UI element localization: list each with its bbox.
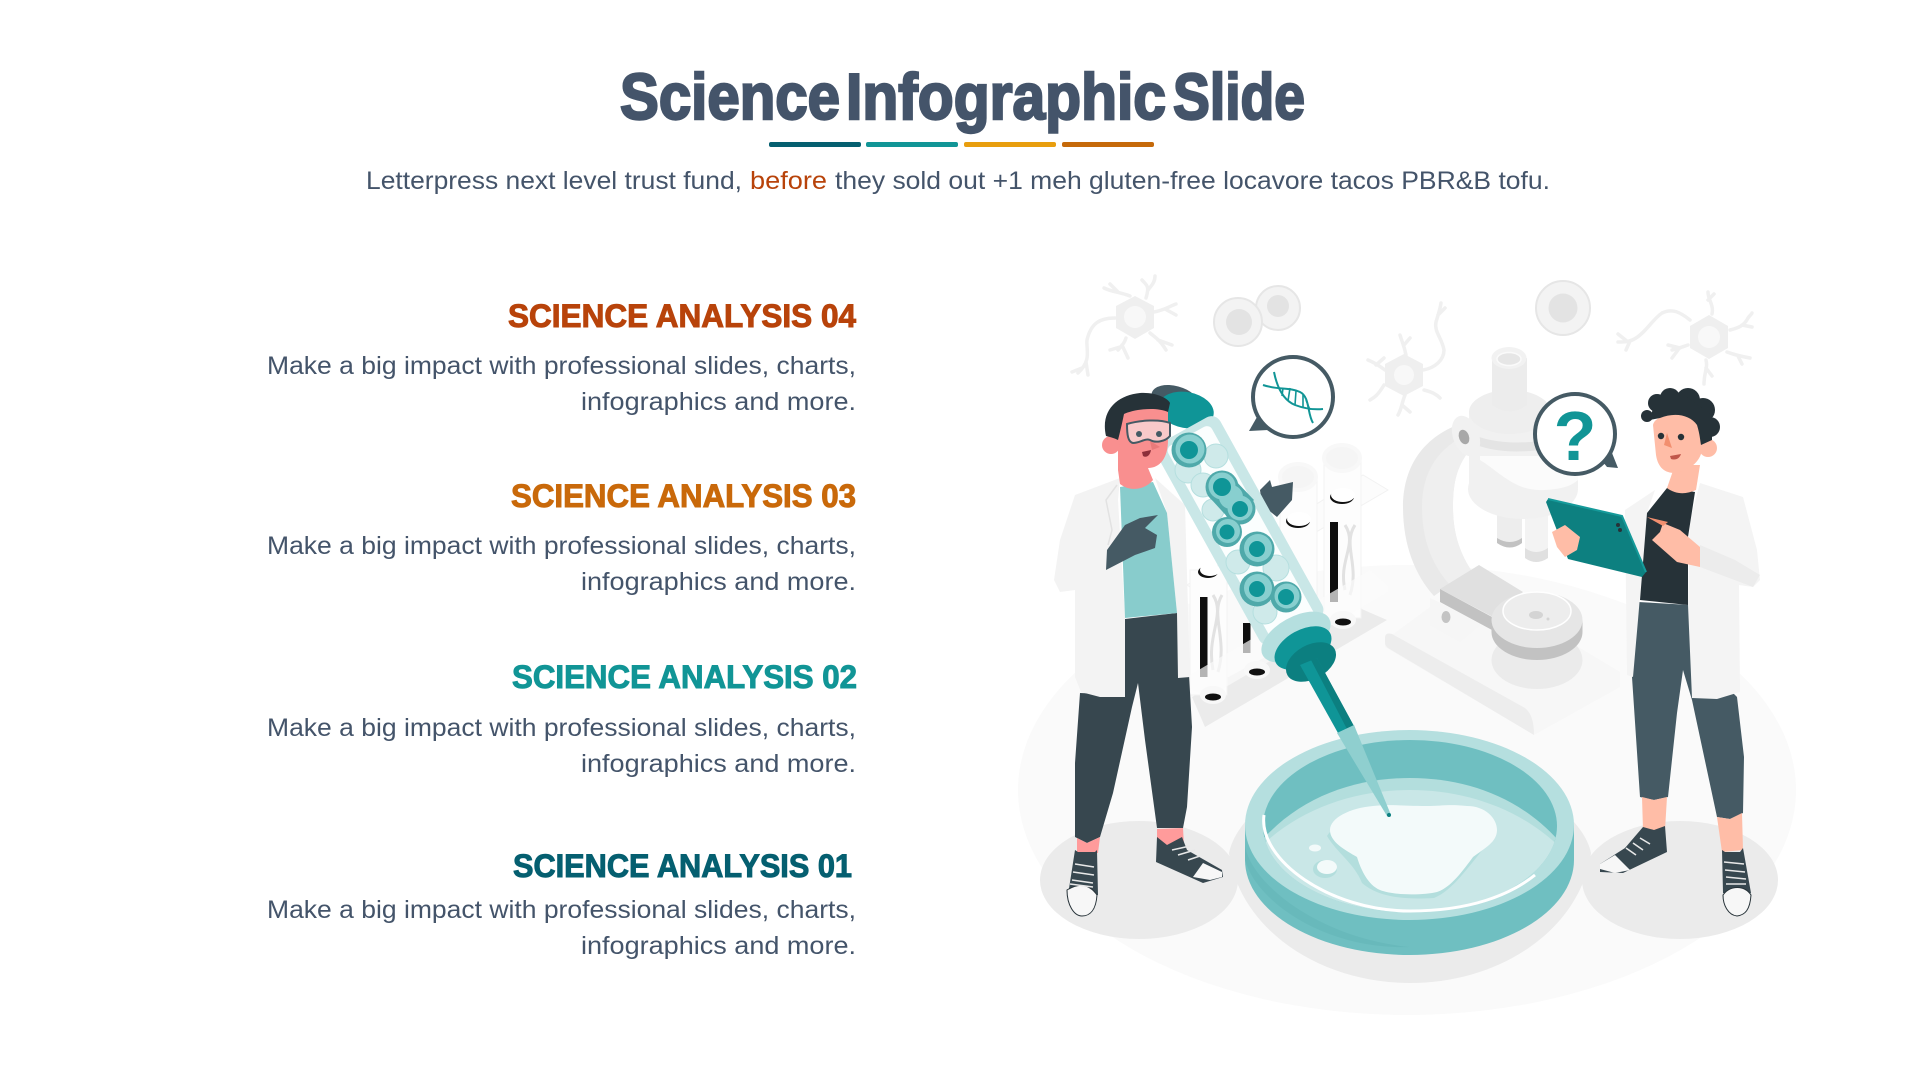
text block: science analysis 04: infographics and more. — [581, 388, 856, 416]
dish well — [1263, 740, 1557, 910]
title — [620, 60, 1305, 133]
liquid puddle shadow — [1327, 812, 1494, 898]
subtitle: before — [750, 167, 827, 195]
pants — [1632, 602, 1744, 819]
neck and face — [1118, 405, 1168, 489]
dish inner white edge — [1264, 815, 1535, 911]
teal cells — [1172, 432, 1302, 612]
text block: science analysis 01: infographics and more. — [581, 932, 856, 960]
syringe tip — [1337, 725, 1391, 817]
left scientist head — [1102, 393, 1170, 489]
rack black strips and dna — [1200, 522, 1355, 677]
syringe tube — [1153, 413, 1327, 649]
text block: science analysis 04: SCIENCE ANALYSIS 04 — [508, 298, 856, 334]
left scientist front shoe — [1067, 850, 1098, 916]
rack back tubes — [1190, 445, 1361, 695]
icon: neuron right — [1618, 292, 1752, 384]
icon: neuron top left — [1072, 276, 1176, 375]
subtitle: they sold out +1 meh gluten-free locavore tacos PBR&B tofu. — [835, 167, 1550, 195]
subtitle — [366, 167, 1550, 195]
speech bubble: question mark: ? — [1554, 397, 1596, 475]
rack bottom plate — [1190, 570, 1388, 698]
microscope base plate — [1385, 600, 1620, 735]
right scientist — [1546, 388, 1760, 916]
text block: science analysis 02: Make a big impact with professional slides, charts, — [267, 714, 856, 742]
microscope knob — [1447, 412, 1485, 460]
icon: single cell — [1536, 281, 1590, 335]
microscope eyepiece — [1492, 347, 1527, 412]
text block: science analysis 04: Make a big impact with professional slides, charts, — [267, 352, 856, 380]
text block: science analysis 03 — [267, 478, 856, 596]
hair — [1641, 388, 1720, 445]
coat sleeve — [1700, 545, 1760, 587]
text block: science analysis 04 — [267, 298, 856, 416]
icon: neuron centre — [1368, 303, 1445, 415]
neck — [1667, 465, 1700, 493]
socks — [1077, 828, 1184, 853]
ear — [1699, 439, 1717, 457]
microscope arm — [1403, 425, 1471, 596]
icon: paired cells — [1214, 286, 1300, 346]
hand holding tablet — [1552, 525, 1580, 557]
lab coat — [1054, 478, 1190, 697]
text block: science analysis 01: SCIENCE ANALYSIS 01 — [513, 848, 852, 884]
microscope objectives — [1497, 505, 1548, 562]
hair — [1105, 393, 1170, 440]
floor shadows — [1040, 821, 1778, 983]
pointing hand — [1647, 517, 1700, 567]
title: Infographic — [846, 60, 1166, 133]
pointing glove — [1106, 515, 1158, 570]
text block: science analysis 02: SCIENCE ANALYSIS 02 — [512, 659, 857, 695]
text block: science analysis 03: Make a big impact with professional slides, charts, — [267, 532, 856, 560]
petri dish — [1245, 730, 1574, 955]
microscope — [1385, 347, 1620, 735]
face — [1653, 414, 1702, 473]
microscope stage — [1492, 592, 1582, 660]
text block: science analysis 01 — [267, 848, 856, 960]
goggles — [1127, 420, 1170, 443]
far glove — [1260, 480, 1293, 517]
speech bubble: DNA — [1249, 357, 1333, 437]
right scientist side shoe — [1600, 826, 1667, 873]
background blob — [1018, 565, 1796, 1015]
pale background cells — [1175, 444, 1289, 624]
title: Science — [620, 60, 840, 133]
text block: science analysis 02 — [267, 659, 857, 778]
calves — [1642, 797, 1743, 852]
microscope pedestal — [1430, 598, 1480, 642]
text block: science analysis 02: infographics and more. — [581, 750, 856, 778]
icon: DNA helix — [1263, 372, 1323, 423]
microscope stage shadow — [1492, 631, 1582, 689]
text block: science analysis 01: Make a big impact with professional slides, charts, — [267, 896, 856, 924]
title: Slide — [1173, 60, 1305, 133]
dish rim — [1245, 730, 1574, 920]
shirt — [1120, 482, 1177, 618]
syringe — [1148, 380, 1391, 817]
speech bubble: question mark — [1535, 394, 1618, 475]
tablet — [1546, 499, 1646, 577]
shirt — [1640, 488, 1695, 605]
dish body — [1245, 765, 1574, 955]
rack top plate — [1187, 475, 1388, 597]
text block: science analysis 03: infographics and more. — [581, 568, 856, 596]
syringe stem — [1300, 658, 1355, 733]
left scientist side shoe — [1156, 837, 1223, 883]
test tube rack — [1187, 445, 1388, 727]
left scientist body — [1054, 478, 1293, 916]
eyes, nose, mouth — [1658, 433, 1684, 459]
lab coat — [1625, 483, 1760, 699]
pants — [1075, 613, 1192, 843]
subtitle: Letterpress next level trust fund, — [366, 167, 742, 195]
microscope stage arm — [1440, 565, 1523, 630]
illustration: scientists with syringe and petri dish — [1018, 276, 1796, 1015]
syringe top cap — [1148, 380, 1217, 433]
syringe collar — [1253, 601, 1343, 690]
ear — [1102, 436, 1120, 454]
right scientist front shoe — [1722, 848, 1751, 916]
microscope head — [1468, 390, 1578, 519]
title underline: four colored bars — [769, 142, 1154, 147]
text block: science analysis 03: SCIENCE ANALYSIS 03 — [511, 478, 856, 514]
nose and mouth — [1142, 441, 1160, 457]
rack floor shadow — [1192, 607, 1387, 727]
rack tube ends — [1198, 488, 1356, 704]
liquid puddle — [1330, 805, 1497, 894]
droplets — [1309, 844, 1337, 878]
